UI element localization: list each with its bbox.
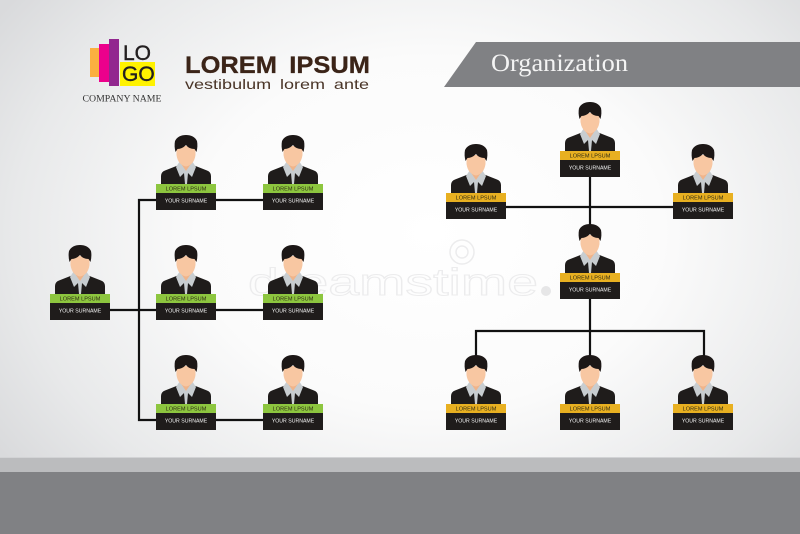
person: bottom middle [156,355,216,430]
right chart: employee cards [446,102,733,430]
person: lower right [673,355,733,430]
person: lower middle: YOUR SURNAME [569,418,612,424]
logo bars [90,39,155,86]
floor band [0,457,800,534]
logo text: GO [122,63,155,86]
logo [82,39,162,104]
person: top: YOUR SURNAME [569,166,612,172]
person: top middle [156,135,216,210]
person: lower middle: LOREM LPSUM [570,406,611,412]
person: centre middle: LOREM LPSUM [166,296,207,302]
person: upper right [673,144,733,219]
person: centre middle [156,245,216,320]
person: root [50,245,110,320]
person: top middle: LOREM LPSUM [166,186,207,192]
person: top: LOREM LPSUM [570,154,611,160]
person: centre right [263,245,323,320]
title [185,52,370,92]
company name: COMPANY NAME [82,94,162,104]
person: lower right: LOREM LPSUM [683,406,724,412]
person: upper right: YOUR SURNAME [682,208,725,214]
person: top [560,102,620,177]
title: LOREM IPSUM [185,52,370,79]
person: upper left [446,144,506,219]
person: upper right: LOREM LPSUM [683,196,724,202]
person: lower left: LOREM LPSUM [456,406,497,412]
person: root: YOUR SURNAME [59,308,102,314]
person: lower left: YOUR SURNAME [455,418,498,424]
person: bottom middle: YOUR SURNAME [165,418,208,424]
person: top right: YOUR SURNAME [272,198,315,204]
logo text [122,42,155,86]
person: centre middle: YOUR SURNAME [165,308,208,314]
person: bottom middle: LOREM LPSUM [166,406,207,412]
person: centre right: YOUR SURNAME [272,308,315,314]
person: top middle: YOUR SURNAME [165,198,208,204]
person: root: LOREM LPSUM [60,296,101,302]
watermark [248,240,551,304]
person: upper left: LOREM LPSUM [456,196,497,202]
header banner: Organization [491,48,628,77]
watermark: dreamstime [248,262,538,304]
person: lower right: YOUR SURNAME [682,418,725,424]
person: middle: YOUR SURNAME [569,288,612,294]
person: lower middle [560,355,620,430]
person: centre right: LOREM LPSUM [273,296,314,302]
person: bottom right: YOUR SURNAME [272,418,315,424]
logo text: LO [123,42,151,65]
person: middle: LOREM LPSUM [570,276,611,282]
person: upper left: YOUR SURNAME [455,208,498,214]
connectors: right chart [476,177,704,358]
person: bottom right: LOREM LPSUM [273,406,314,412]
person: middle [560,224,620,299]
person: top right [263,135,323,210]
left chart: employee cards [50,135,323,430]
person: top right: LOREM LPSUM [273,186,314,192]
header banner [444,42,800,87]
title: vestibulum lorem ante [185,76,369,92]
person: lower left [446,355,506,430]
person: bottom right [263,355,323,430]
connectors: left chart [110,200,263,420]
